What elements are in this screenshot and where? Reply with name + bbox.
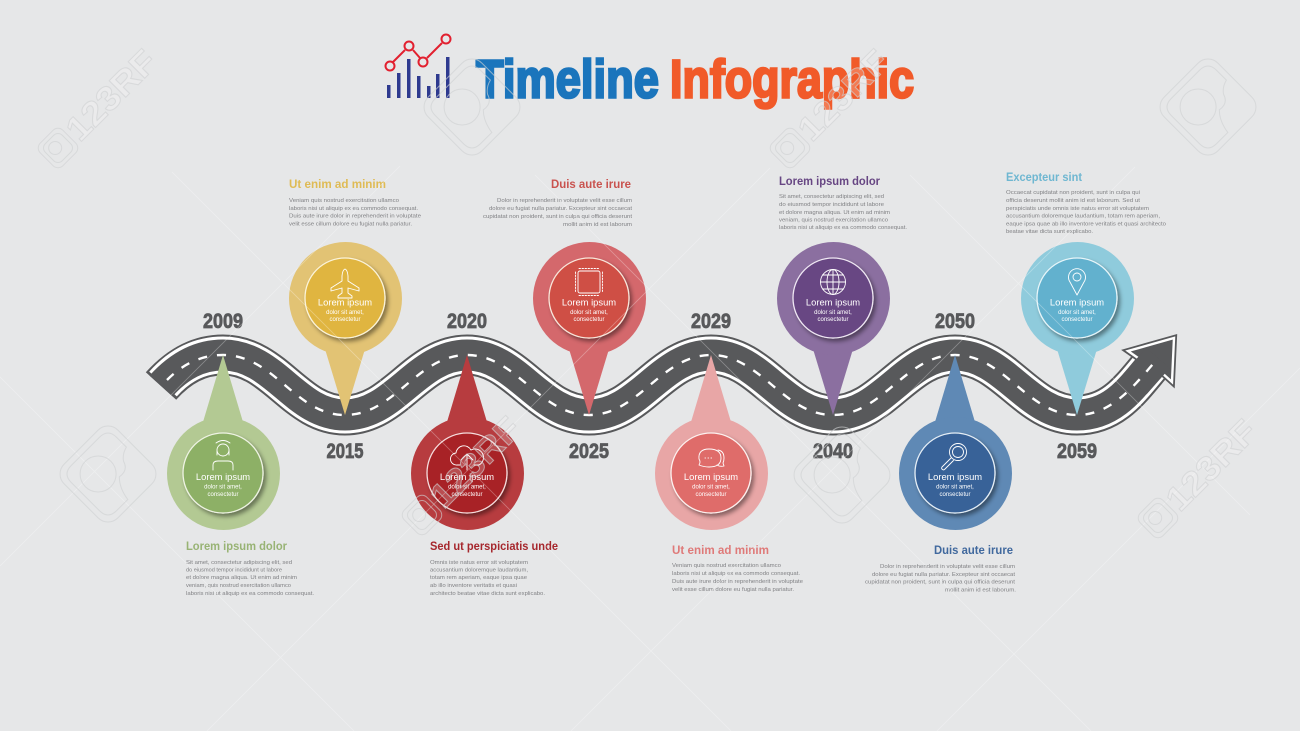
text block: green: Sit amet, consectetur adipiscing elit, sed (186, 560, 292, 566)
text block: coral: cupidatat non proident, sunt in culpa qui officia deserunt (483, 214, 632, 220)
icon: magnifying glass (942, 444, 966, 470)
pin 2059 teal: Lorem ipsum (1050, 296, 1104, 308)
title: Infographic (670, 50, 914, 110)
pin 2040 purple (777, 242, 890, 415)
text block: purple: laboris nisi ut aliquip ex ea commodo consequat. (779, 225, 907, 231)
pin 2059 teal: consectetur (1061, 317, 1093, 323)
years: 2020 (447, 310, 487, 333)
pin 2025 coral: dolor sit amet, (570, 310, 608, 316)
pin 2015 yellow: consectetur (329, 317, 361, 323)
text block: blue: Dolor in reprehenderit in voluptate velit esse cillum (880, 564, 1015, 570)
text block: green (186, 539, 314, 597)
text block: teal: Occaecat cupidatat non proident, sunt in culpa qui (1006, 190, 1140, 196)
text block: blue: mollit anim id est laborum. (945, 588, 1016, 594)
winding road with arrow (161, 338, 1174, 415)
years (203, 310, 1097, 463)
title: Timeline (476, 50, 659, 110)
text block: purple: et dolore magna aliqua. Ut enim ad minim (779, 210, 890, 216)
pin 2020 red (411, 355, 524, 530)
text block: yellow: Veniam quis nostrud exercitation ullamco (289, 198, 399, 204)
text block: yellow (289, 177, 421, 228)
pin 2059 teal (1021, 242, 1134, 415)
text block: red: Omnis iste natus error sit voluptatem (430, 560, 528, 566)
years: 2059 (1057, 440, 1097, 463)
icon: headset agent (213, 440, 233, 470)
pin 2015 yellow (289, 242, 402, 415)
pin 2020 red: consectetur (451, 492, 483, 498)
text block: green: et dolore magna aliqua. Ut enim ad minim (186, 575, 297, 581)
text block: red: totam rem aperiam, eaque ipsa quae (430, 575, 527, 581)
text block: yellow: laboris nisi ut aliquip ex ea commodo consequat. (289, 206, 418, 212)
title (476, 50, 914, 110)
text block: red: accusantium doloremque laudantium, (430, 568, 528, 574)
text block: blue: Duis aute irure (934, 543, 1013, 557)
icon: location marker (1069, 269, 1086, 295)
pin 2009 green: consectetur (207, 492, 239, 498)
text block: blue: dolore eu fugiat nulla pariatur. Excepteur sint occaecat (872, 572, 1015, 578)
pin 2029 pink: consectetur (695, 492, 727, 498)
text block: teal: officia deserunt mollit anim id est laborum. Sed ut (1006, 198, 1140, 204)
years: 2009 (203, 310, 243, 333)
text block: pink: Duis aute irure dolor in reprehenderit in voluptate (672, 579, 803, 585)
text block: yellow: Duis aute irure dolor in reprehenderit in voluptate (289, 214, 421, 220)
chart icon (386, 34, 450, 98)
pin 2020 red: dolor sit amet, (448, 484, 486, 490)
pin 2040 purple: dolor sit amet, (814, 310, 852, 316)
text block: coral: Dolor in reprehenderit in voluptate velit esse cillum (497, 198, 632, 204)
pin 2050 blue: Lorem ipsum (928, 471, 982, 482)
icon: cloud upload (450, 446, 483, 470)
watermark overlay: 123RF (1159, 413, 1265, 519)
text block: red (430, 539, 558, 597)
text block: pink: velit esse cillum dolore eu fugiat nulla pariatur. (672, 587, 794, 593)
pin 2009 green: dolor sit amet, (204, 484, 242, 490)
text block: pink: Ut enim ad minim (672, 543, 769, 557)
text block: purple: Sit amet, consectetur adipiscing elit, sed (779, 194, 884, 200)
text block: red: architecto beatae vitae dicta sunt explicabo. (430, 591, 545, 597)
pin 2050 blue: consectetur (939, 492, 971, 498)
text block: blue (865, 543, 1016, 594)
pin 2029 pink: Lorem ipsum (684, 471, 738, 482)
text block: coral (483, 177, 632, 228)
icon: speech bubbles (699, 449, 724, 467)
text block: yellow: Ut enim ad minim (289, 177, 386, 191)
text block: coral: dolore eu fugiat nulla pariatur. Excepteur sint occaecat (489, 206, 632, 212)
text block: purple: do eiusmod tempor incididunt ut labore (779, 202, 884, 208)
text block: teal: accusantium doloremque laudantium, totam rem aperiam, (1006, 214, 1160, 220)
text block: red: Sed ut perspiciatis unde (430, 539, 558, 553)
pin 2029 pink: dolor sit amet, (692, 484, 730, 490)
text block: pink: Veniam quis nostrud exercitation ullamco (672, 563, 781, 569)
pin 2059 teal: dolor sit amet, (1058, 310, 1096, 316)
pin 2040 purple: consectetur (817, 317, 849, 323)
years: 2015 (326, 440, 364, 463)
icon: globe (820, 270, 846, 294)
text block: blue: cupidatat non proident, sunt in culpa qui officia deserunt (865, 580, 1015, 586)
text block: teal (1006, 170, 1166, 235)
years: 2050 (935, 310, 975, 333)
text block: pink (672, 543, 803, 593)
years: 2040 (813, 440, 853, 463)
watermark overlay: 123RF (423, 410, 529, 516)
years: 2029 (691, 310, 731, 333)
pin 2029 pink (655, 355, 768, 530)
text block: red: ab illo inventore veritatis et quasi (430, 583, 517, 589)
text block: purple (779, 174, 907, 231)
watermark overlay: 123RF (791, 43, 897, 149)
text block: green: veniam, quis nostrud exercitation ullamco (186, 583, 291, 589)
text block: pink: laboris nisi ut aliquip ex ea commodo consequat. (672, 571, 800, 577)
text block: green: laboris nisi ut aliquip ex ea commodo consequat. (186, 591, 314, 597)
pin 2025 coral: Lorem ipsum (562, 296, 616, 308)
pin 2050 blue: dolor sit amet, (936, 484, 974, 490)
pin 2020 red: Lorem ipsum (440, 471, 494, 482)
years: 2025 (569, 440, 609, 463)
text block: purple: veniam, quis nostrud exercitation ullamco (779, 218, 888, 224)
pin 2050 blue (899, 355, 1012, 530)
text block: green: do eiusmod tempor incididunt ut labore (186, 568, 282, 574)
pin 2009 green (167, 355, 280, 530)
text block: teal: beatae vitae dicta sunt explicabo. (1006, 229, 1093, 235)
pin 2025 coral (533, 242, 646, 415)
text block: yellow: velit esse cillum dolore eu fugiat nulla pariatur. (289, 222, 412, 228)
pin 2009 green: Lorem ipsum (196, 471, 250, 482)
pin 2040 purple: Lorem ipsum (806, 296, 860, 308)
text block: teal: perspiciatis unde omnis iste natus error sit voluptatem (1006, 206, 1149, 212)
pin 2015 yellow: Lorem ipsum (318, 296, 372, 308)
text block: teal: Excepteur sint (1006, 170, 1082, 184)
pin 2025 coral: consectetur (573, 317, 605, 323)
text block: teal: eaque ipsa quae ab illo inventore veritatis et quasi architecto (1006, 222, 1166, 228)
icon: airplane (331, 269, 359, 298)
text block: coral: mollit anim id est laborum (563, 222, 632, 228)
pin 2015 yellow: dolor sit amet, (326, 310, 364, 316)
text block: coral: Duis aute irure (551, 177, 631, 191)
icon: microchip (576, 268, 602, 296)
watermark overlay: 123RF (59, 43, 165, 149)
text block: purple: Lorem ipsum dolor (779, 174, 880, 188)
text block: green: Lorem ipsum dolor (186, 539, 287, 553)
